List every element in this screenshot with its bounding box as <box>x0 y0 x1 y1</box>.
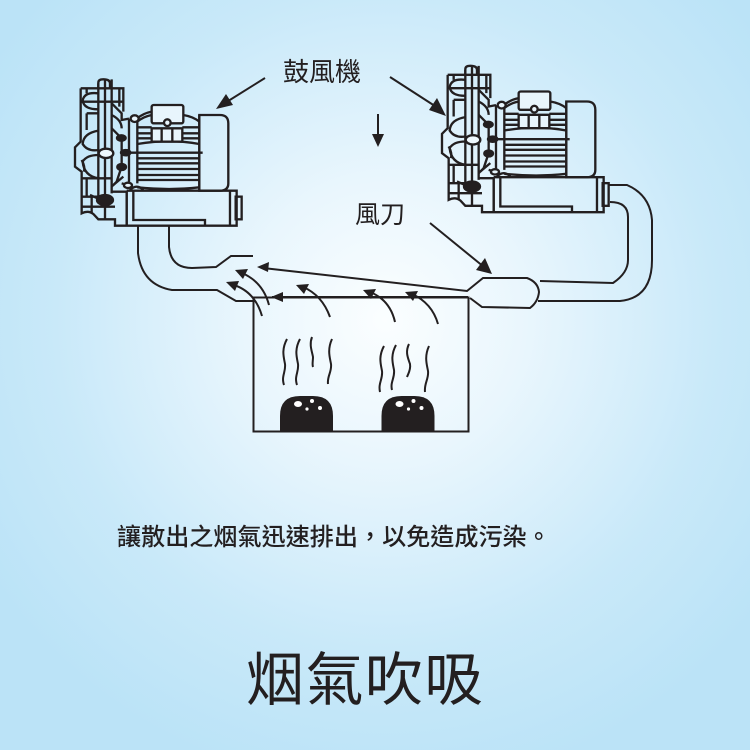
arrow: blower label to left blower <box>216 78 265 109</box>
caption: 讓散出之烟氣迅速排出，以免造成污染。 <box>117 524 551 551</box>
label: blower: 鼓風機 <box>283 57 361 87</box>
arrow: down <box>372 114 384 147</box>
airflow arrows <box>226 262 468 324</box>
icon: right burner <box>382 396 434 431</box>
icon: left blower <box>75 79 242 226</box>
arrow: blower label to right blower <box>390 77 446 116</box>
arrow: air knife label to knife <box>430 223 492 274</box>
title: 烟氣吹吸 <box>246 648 484 713</box>
label: air knife: 風刀 <box>355 201 405 229</box>
left duct <box>138 225 253 301</box>
icon: right blower <box>442 66 609 212</box>
hood enclosure <box>254 298 468 432</box>
steam lines <box>283 337 429 392</box>
air knife and right duct <box>263 185 652 308</box>
icon: left burner <box>280 396 333 431</box>
